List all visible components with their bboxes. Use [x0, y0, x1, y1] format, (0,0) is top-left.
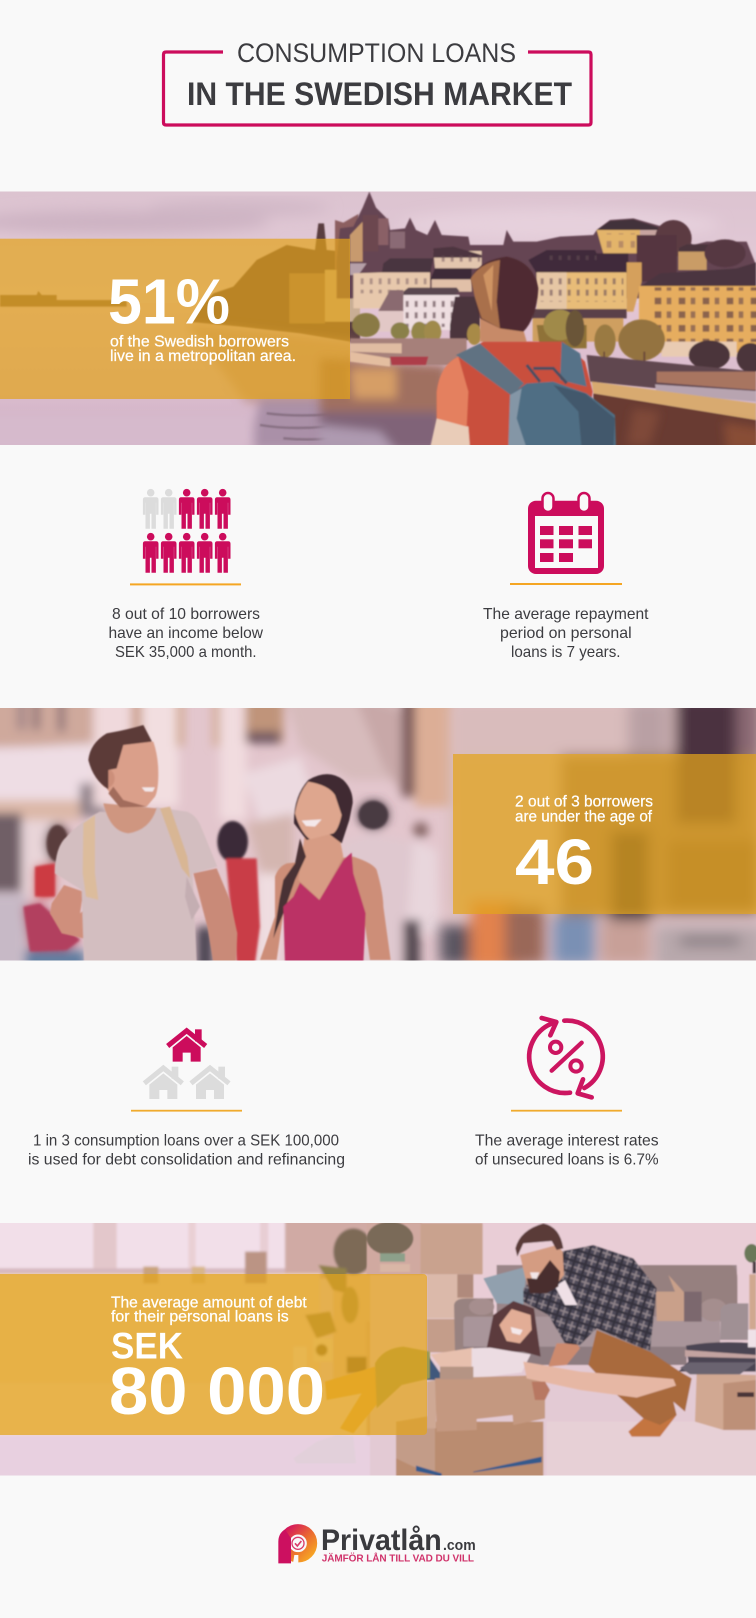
stat: 51%: 51%	[108, 265, 230, 337]
city buildings	[337, 192, 756, 448]
traveller	[430, 257, 616, 448]
icon: calendar	[528, 493, 604, 574]
white building	[403, 288, 459, 296]
logo: Privatlån.com	[278, 1524, 476, 1565]
left pale buildings	[382, 258, 433, 272]
woman's legs under band	[324, 1346, 431, 1434]
panel: income statistic	[108, 489, 263, 661]
icon: three houses	[144, 1029, 229, 1099]
consolidation text: is used for debt consolidation and refinancing	[28, 1152, 345, 1168]
right large building	[640, 262, 756, 287]
stat caption: for their personal loans is	[111, 1309, 289, 1326]
blurred right side (under band)	[440, 695, 756, 970]
stat caption: are under the age of	[515, 809, 653, 826]
right room	[367, 1222, 756, 1482]
stat caption: of the Swedish borrowers	[110, 334, 289, 351]
plant under band	[318, 1265, 347, 1293]
photo: Stockholm waterfront with traveller	[0, 190, 756, 452]
background people	[45, 823, 69, 863]
backpack	[456, 343, 524, 396]
gold stat band	[453, 754, 756, 914]
consolidation text: 1 in 3 consumption loans over a SEK 100,000	[33, 1133, 339, 1150]
sharper background figures	[23, 801, 388, 963]
interest rate text: The average interest rates	[475, 1133, 659, 1150]
title	[164, 38, 591, 125]
right box and table	[695, 1373, 756, 1430]
icon: P mark	[278, 1529, 312, 1563]
title frame	[164, 52, 591, 125]
panel: moving photo with debt statistic	[0, 1208, 756, 1488]
water	[593, 393, 756, 448]
quay, road, wall	[350, 338, 467, 365]
floor	[370, 1365, 756, 1482]
wordmark: Privatlån	[321, 1524, 442, 1557]
left room	[0, 1223, 370, 1436]
income text: 8 out of 10 borrowers	[112, 606, 260, 623]
centre roofs	[528, 250, 628, 273]
photo: couple walking on street	[0, 693, 756, 973]
repayment text: The average repayment	[483, 606, 649, 623]
panel: debt consolidation statistic	[28, 1029, 345, 1168]
icon: people, 8 of 10 highlighted	[143, 489, 230, 573]
blurred street background	[0, 693, 455, 973]
trees	[352, 313, 380, 337]
stat caption	[110, 334, 296, 365]
stat caption	[515, 794, 653, 826]
left shore under band	[0, 214, 360, 450]
income text: SEK 35,000 a month.	[115, 644, 256, 661]
woman	[487, 1301, 541, 1357]
interest rate text	[475, 1133, 659, 1168]
woman	[260, 774, 391, 963]
gold stat band	[0, 239, 350, 399]
repayment text: loans is 7 years.	[511, 644, 620, 661]
domain suffix: .com	[443, 1537, 476, 1554]
water near the traveller	[320, 358, 447, 452]
tagline: JÄMFÖR LÅN TILL VAD DU VILL	[322, 1552, 474, 1565]
stat caption: 2 out of 3 borrowers	[515, 794, 653, 811]
stat: SEK 80 000	[109, 1325, 325, 1429]
panel: repayment period statistic	[483, 493, 649, 661]
box	[396, 1422, 543, 1477]
repayment text: period on personal	[500, 625, 632, 642]
stat: 46: 46	[515, 826, 594, 898]
title line two: IN THE SWEDISH MARKET	[187, 76, 572, 112]
interest rate text: of unsecured loans is 6.7%	[475, 1152, 659, 1168]
stat caption: The average amount of debt	[111, 1294, 307, 1311]
panel: couple photo with age statistic	[0, 693, 756, 973]
stat: SEK 80 000: 80 000	[109, 1354, 325, 1429]
panel: city photo with 51% statistic	[0, 190, 756, 452]
title line one: CONSUMPTION LOANS	[237, 38, 516, 68]
income text	[108, 606, 263, 661]
repayment text	[483, 606, 649, 661]
stat caption: live in a metropolitan area.	[110, 348, 296, 365]
photo: couple with moving boxes	[0, 1208, 756, 1488]
dark trees top right	[655, 220, 692, 257]
income text: have an income below	[108, 625, 263, 642]
distant silhouette	[337, 192, 756, 298]
man	[548, 1343, 580, 1367]
stat: SEK 80 000: SEK	[111, 1325, 183, 1366]
icon: circular arrows with percent	[529, 1018, 603, 1097]
gold stat band	[0, 1274, 427, 1435]
panel: interest rate statistic	[475, 1018, 659, 1168]
man	[50, 725, 237, 963]
stat caption	[111, 1294, 307, 1326]
consolidation text	[28, 1133, 345, 1168]
